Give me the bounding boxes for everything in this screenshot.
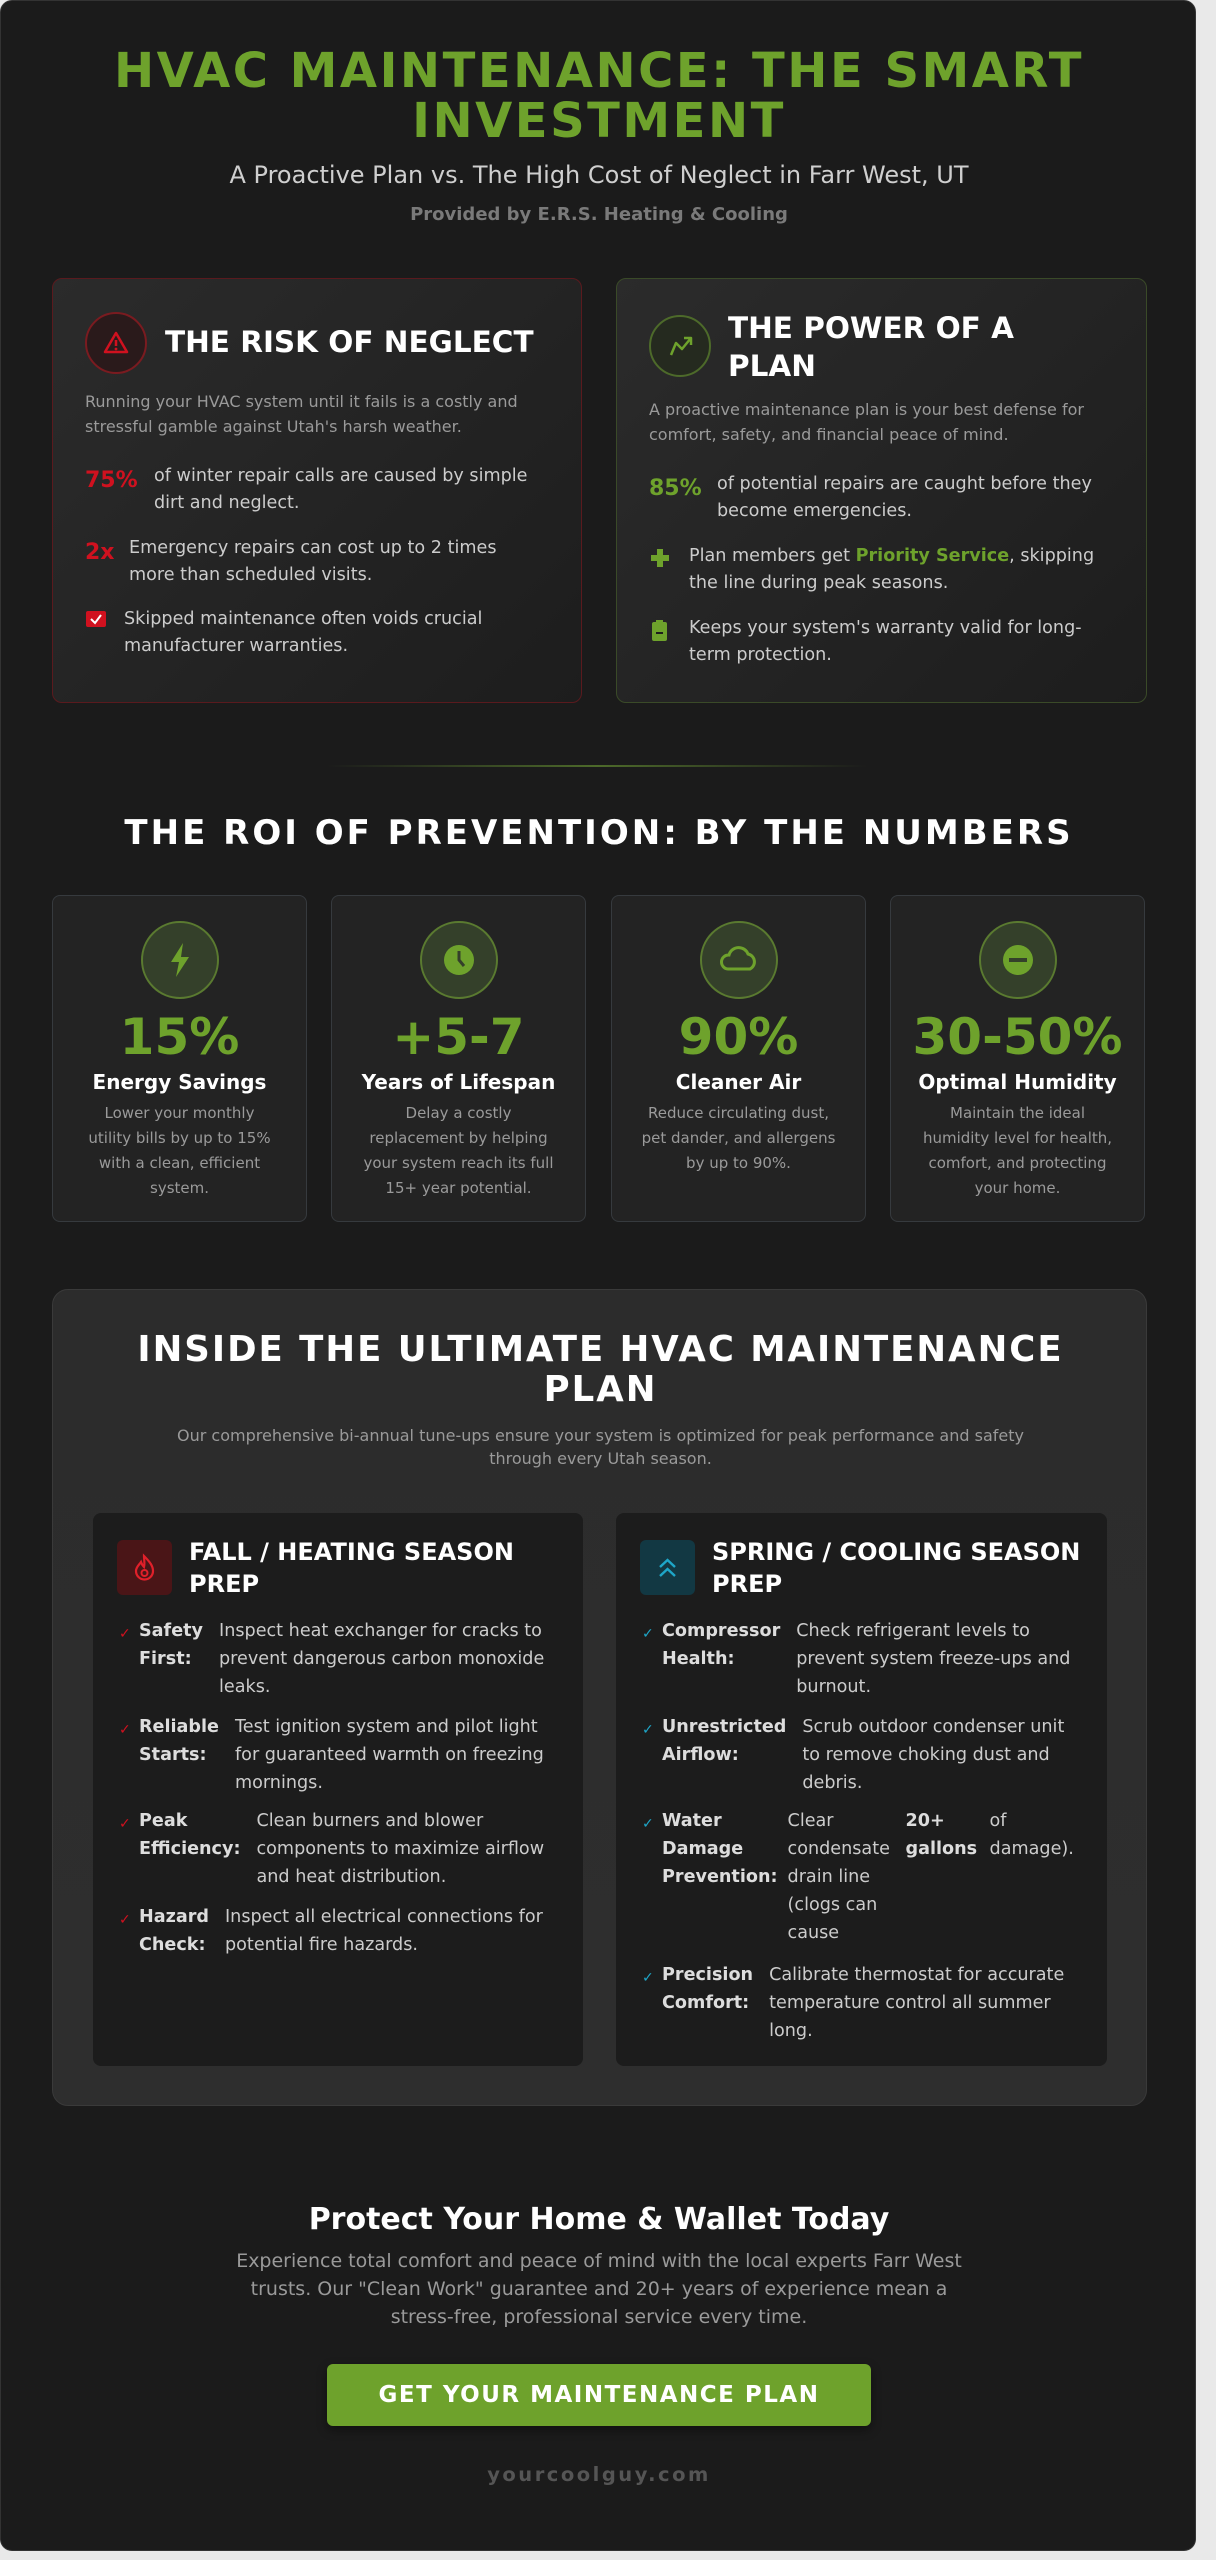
icon: bolt xyxy=(141,921,219,999)
item: Damage xyxy=(662,1839,743,1859)
intro: Our comprehensive bi-annual tune-ups ensure your system is optimized for peak performance and safety through every Utah season. xyxy=(177,1426,1024,1468)
heading: PLAN xyxy=(728,349,816,383)
heading xyxy=(189,1538,514,1598)
icon: chevrons xyxy=(640,1540,695,1595)
button xyxy=(327,2364,871,2426)
stat card: air: Cleaner Air xyxy=(676,1070,801,1094)
stat card: energy: 15% xyxy=(120,1008,239,1066)
heading: PREP xyxy=(712,1570,782,1598)
stat 75%: 75% xyxy=(85,468,138,493)
item: Test ignition system and pilot light for guaranteed warmth on freezing mornings. xyxy=(235,1717,544,1793)
stat card: energy xyxy=(52,895,307,1222)
item: ✓ xyxy=(642,1722,654,1738)
icon: clock xyxy=(420,921,498,999)
item: ✓ xyxy=(119,1816,131,1832)
item: Clean burners and blower components to maximize airflow and heat distribution. xyxy=(256,1811,544,1887)
panel: fall xyxy=(93,1513,583,2066)
icon: chart xyxy=(649,315,711,377)
item: Comfort: xyxy=(662,1993,749,2013)
item: Airflow: xyxy=(662,1745,739,1765)
item: Compressor xyxy=(662,1621,780,1641)
heading: PLAN xyxy=(544,1369,657,1410)
provider line: Provided by E.R.S. Heating & Cooling xyxy=(410,204,788,225)
item: Efficiency: xyxy=(139,1839,240,1859)
item: Check refrigerant levels to prevent system freeze-ups and burnout. xyxy=(796,1621,1070,1697)
title: HVAC MAINTENANCE: THE SMART xyxy=(114,43,1084,99)
footer: yourcoolguy.com xyxy=(487,2463,711,2486)
item: ✓ xyxy=(642,1970,654,1986)
stat card: air: 90% xyxy=(679,1008,798,1066)
item xyxy=(642,1965,1064,2041)
panel: risk of neglect xyxy=(52,278,582,703)
item: of damage). xyxy=(990,1811,1074,1859)
heading: INSIDE THE ULTIMATE HVAC MAINTENANCE xyxy=(137,1329,1064,1370)
item: ✓ xyxy=(642,1816,654,1832)
item xyxy=(642,1717,1064,1793)
panel: spring xyxy=(616,1513,1107,2066)
heading xyxy=(728,311,1014,383)
heading xyxy=(712,1538,1080,1598)
stat card: lifespan: Years of Lifespan xyxy=(362,1070,555,1094)
heading xyxy=(137,1329,1064,1410)
warranty valid: Keeps your system's warranty valid for long-term protection. xyxy=(689,618,1082,665)
item: Reliable xyxy=(139,1717,219,1737)
section title: ROI: THE ROI OF PREVENTION: BY THE NUMBERS xyxy=(124,813,1074,853)
item xyxy=(119,1811,544,1887)
item: First: xyxy=(139,1649,192,1669)
stat 85%: of potential repairs are caught before they become emergencies. xyxy=(717,474,1092,521)
item: ✓ xyxy=(119,1626,131,1642)
stat card: energy: Energy Savings xyxy=(93,1070,266,1094)
item: Precision xyxy=(662,1965,753,1985)
icon: warning xyxy=(85,312,147,374)
item: Calibrate thermostat for accurate temperature control all summer long. xyxy=(769,1965,1064,2041)
stat card: lifespan xyxy=(331,895,586,1222)
item: Health: xyxy=(662,1649,735,1669)
stat card: humidity xyxy=(890,895,1145,1222)
item: Unrestricted xyxy=(662,1717,786,1737)
stat card: lifespan: +5-7 xyxy=(392,1008,525,1066)
CTA heading: Protect Your Home & Wallet Today xyxy=(309,2202,889,2237)
item: Water xyxy=(662,1811,722,1831)
stat 2x: Emergency repairs can cost up to 2 times more than scheduled visits. xyxy=(129,538,496,585)
item: Inspect all electrical connections for potential fire hazards. xyxy=(225,1907,543,1955)
heading: SPRING / COOLING SEASON xyxy=(712,1538,1080,1566)
item: Scrub outdoor condenser unit to remove choking dust and debris. xyxy=(802,1717,1064,1793)
intro: Running your HVAC system until it fails is a costly and stressful gamble against Utah's harsh weather. xyxy=(85,392,518,436)
stat card: humidity: 30-50% xyxy=(912,1008,1122,1066)
stat card: lifespan: Delay a costly replacement by helping your system reach its full 15+ year potential. xyxy=(363,1104,554,1197)
panel: inside the plan xyxy=(52,1289,1147,2106)
CTA text: Experience total comfort and peace of mind with the local experts Farr West trusts. Our "Clean Work" guarantee and 20+ years of experience mean a stress‑free, professional service every time. xyxy=(236,2250,962,2328)
item xyxy=(642,1811,1074,1943)
button: GET YOUR MAINTENANCE PLAN xyxy=(379,2382,819,2408)
item: 20+ gallons xyxy=(906,1811,977,1859)
item: Safety xyxy=(139,1621,203,1641)
subtitle: A Proactive Plan vs. The High Cost of Neglect in Farr West, UT xyxy=(229,161,969,189)
item: Inspect heat exchanger for cracks to prevent dangerous carbon monoxide leaks. xyxy=(219,1621,544,1697)
item: ✓ xyxy=(119,1912,131,1928)
icon: flame xyxy=(117,1540,172,1595)
stat 2x: 2x xyxy=(85,540,114,565)
icon: minus circle xyxy=(979,921,1057,999)
heading: FALL / HEATING SEASON xyxy=(189,1538,514,1566)
intro: A proactive maintenance plan is your best defense for comfort, safety, and financial peace of mind. xyxy=(649,400,1084,444)
item: Hazard xyxy=(139,1907,209,1927)
icon: cloud xyxy=(700,921,778,999)
priority service: Plan members get Priority Service, skipping the line during peak seasons. xyxy=(689,546,1094,593)
heading: THE POWER OF A xyxy=(728,311,1014,345)
stat 75%: of winter repair calls are caused by simple dirt and neglect. xyxy=(154,466,528,513)
item: Starts: xyxy=(139,1745,207,1765)
title: INVESTMENT xyxy=(412,93,786,149)
stat card: energy: Lower your monthly utility bills by up to 15% with a clean, efficient system. xyxy=(88,1104,271,1197)
title xyxy=(114,43,1084,149)
stat 85%: 85% xyxy=(649,476,702,501)
item: ✓ xyxy=(642,1626,654,1642)
warranty note: Skipped maintenance often voids crucial manufacturer warranties. xyxy=(124,609,482,656)
heading: THE RISK OF NEGLECT xyxy=(165,325,534,359)
item xyxy=(642,1621,1070,1697)
item: Peak xyxy=(139,1811,187,1831)
stat card: humidity: Optimal Humidity xyxy=(918,1070,1117,1094)
stat card: air xyxy=(611,895,866,1222)
panel: power of a plan xyxy=(616,278,1147,703)
stat card: air: Reduce circulating dust, pet dander, and allergens by up to 90%. xyxy=(642,1104,835,1172)
item: Prevention: xyxy=(662,1867,778,1887)
item: ✓ xyxy=(119,1722,131,1738)
item: Clear condensate drain line (clogs can cause xyxy=(788,1811,890,1943)
stat card: humidity: Maintain the ideal humidity level for health, comfort, and protecting your home. xyxy=(923,1104,1112,1197)
heading: PREP xyxy=(189,1570,259,1598)
item: Check: xyxy=(139,1935,206,1955)
